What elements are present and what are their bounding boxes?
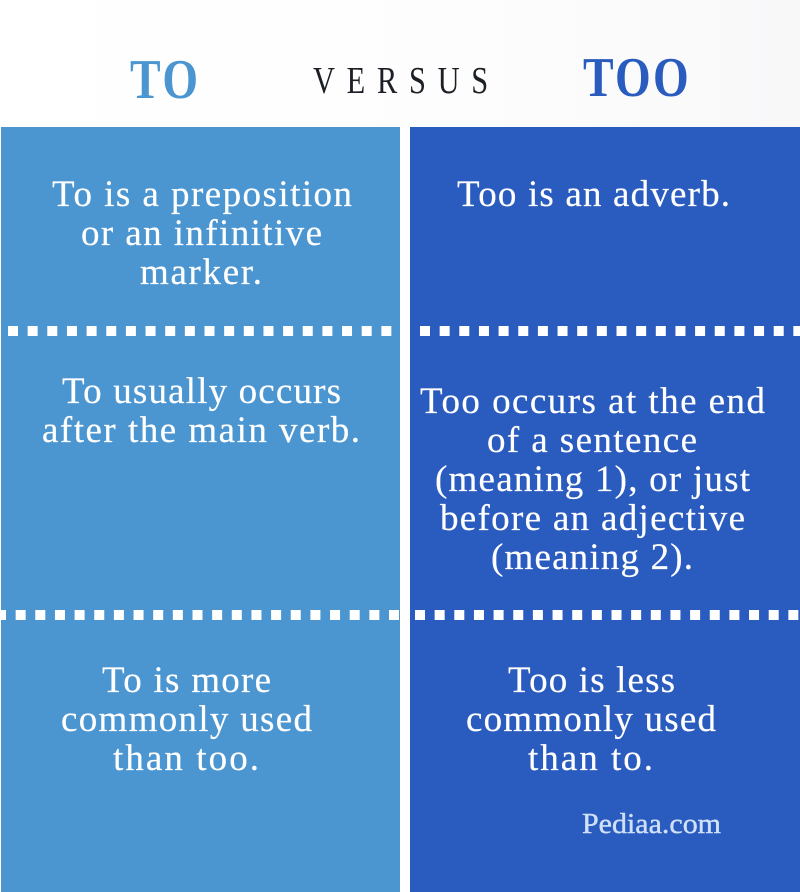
text: Too part of speech: Too is an adverb. [457, 174, 730, 215]
text: To frequency [61, 660, 312, 779]
text: Too position: (meaning 1), or just [435, 459, 751, 500]
text: To part of speech: To is a preposition [52, 174, 352, 215]
text: To frequency: commonly used [61, 699, 312, 740]
text: Too position: before an adjective [440, 498, 745, 539]
text: To frequency: To is more [102, 660, 271, 701]
panel: TO column [1, 127, 400, 892]
text: To position [42, 371, 360, 451]
text: Too frequency [466, 660, 716, 779]
text: To part of speech [52, 174, 352, 293]
text: Too position: of a sentence [487, 420, 697, 461]
text: Too frequency: Too is less [508, 660, 675, 701]
text: To part of speech: or an infinitive [81, 213, 322, 254]
text: Too position: (meaning 2). [491, 537, 693, 578]
text: To position: To usually occurs [62, 371, 341, 412]
text: To frequency: than too. [113, 738, 259, 779]
text: To part of speech: marker. [140, 252, 262, 293]
text: Too frequency: than to. [528, 738, 653, 779]
text: Too position [420, 381, 766, 578]
text: Too position: Too occurs at the end [420, 381, 766, 422]
panel: TOO column [410, 127, 800, 892]
text: Too frequency: commonly used [466, 699, 716, 740]
heading: TOO: TOO [583, 47, 689, 109]
logo: Pediaa.com: Pediaa.com [582, 809, 721, 840]
heading: VERSUS: VERSUS [313, 60, 488, 102]
text: To position: after the main verb. [42, 410, 360, 451]
heading: TO: TO [130, 49, 198, 111]
